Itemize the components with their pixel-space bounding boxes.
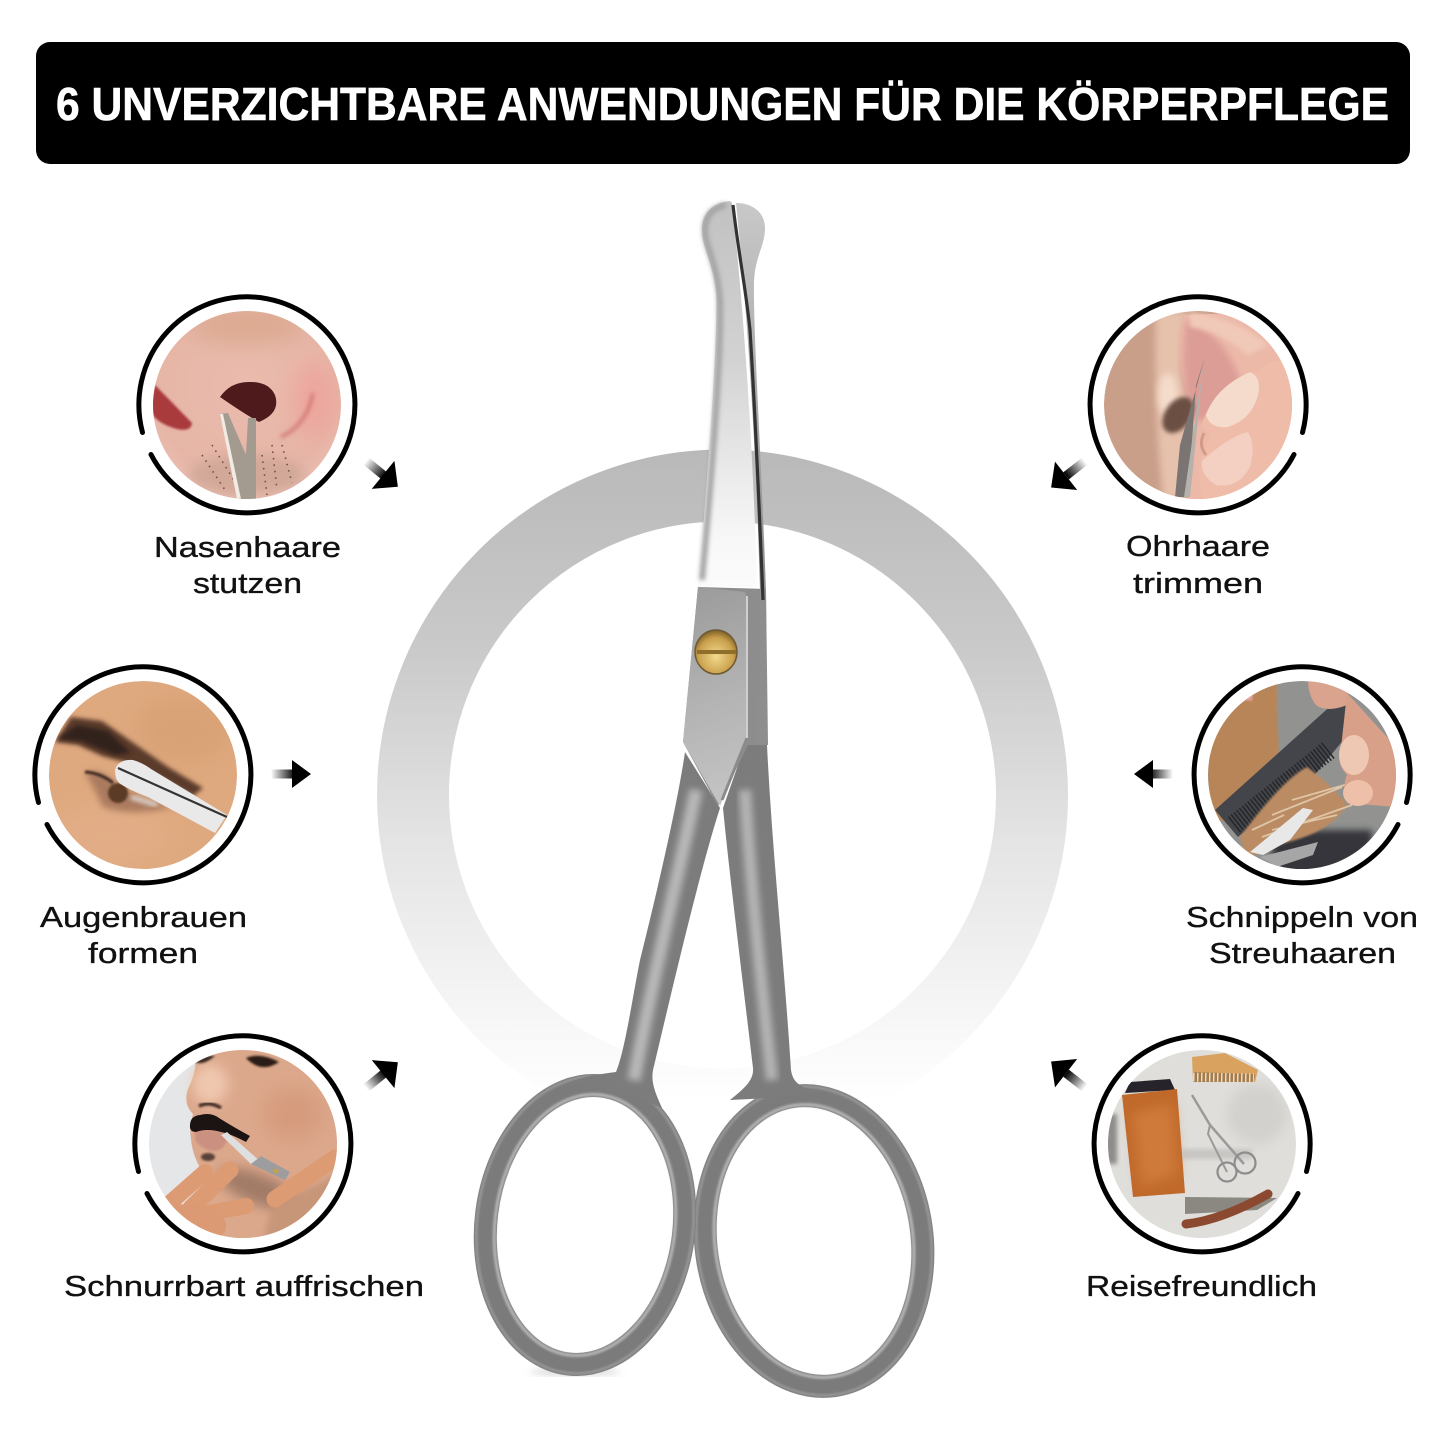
ring: moustache: [135, 1036, 351, 1252]
arrow: ear: [1040, 447, 1096, 502]
label: stray hairs: Schnippeln von: [1186, 902, 1418, 934]
label: eyebrow: Augenbrauen: [40, 902, 247, 934]
use case: eyebrow: [35, 667, 311, 970]
title banner: [36, 42, 1410, 164]
scissors: right finger ring: [677, 1071, 951, 1411]
label: travel: Reisefreundlich: [1086, 1271, 1317, 1303]
scissors: brass screw: [695, 630, 737, 674]
ring: travel: [1094, 1036, 1310, 1252]
ring: ear: [1090, 297, 1306, 513]
label: ear: trimmen: [1133, 568, 1263, 600]
label: eyebrow: [40, 902, 247, 970]
photo: eyebrow: [48, 681, 237, 869]
scissors: right shank: [723, 745, 820, 1100]
scissors: ground shadow: [530, 1369, 620, 1375]
background gradient ring: [413, 486, 1032, 1104]
label: ear: Ohrhaare: [1126, 531, 1270, 563]
arrow: travel: [1040, 1047, 1096, 1102]
photo: ear: [1104, 311, 1292, 499]
label: nose: stutzen: [193, 568, 302, 600]
label: stray hairs: [1186, 902, 1418, 970]
scissors: pivot body: [683, 587, 767, 806]
scissors: left blade: [698, 201, 757, 587]
scissors: [460, 201, 951, 1411]
photo: travel: [1102, 1050, 1296, 1238]
scissors: blade groove: [733, 205, 763, 600]
label: nose: Nasenhaare: [154, 532, 341, 564]
photo: moustache: [149, 1050, 337, 1248]
photo: nose: [149, 307, 341, 499]
use case: nose hair: [139, 297, 409, 600]
photo: stray hairs: [1208, 680, 1396, 880]
label: eyebrow: formen: [88, 938, 198, 970]
label: ear: [1126, 531, 1270, 600]
label: nose: [154, 532, 341, 600]
use case: stray hairs: [1134, 667, 1418, 970]
ring: stray hairs: [1194, 667, 1410, 883]
ring: eyebrow: [35, 667, 251, 883]
label: moustache: Schnurrbart auffrischen: [64, 1271, 424, 1303]
use case: travel friendly: [1040, 1036, 1317, 1303]
label: stray hairs: Streuhaaren: [1209, 938, 1396, 970]
use case: moustache: [64, 1036, 424, 1303]
arrow: eyebrow: [271, 760, 311, 788]
arrow: nose: [355, 447, 409, 501]
ring: nose: [139, 297, 355, 513]
scissors: right blade: [736, 203, 768, 745]
use case: ear hair: [1040, 297, 1306, 600]
scissors: left finger ring: [460, 1064, 710, 1386]
arrow: moustache: [355, 1048, 409, 1102]
scissors: left shank: [570, 752, 720, 1108]
arrow: stray hairs: [1134, 760, 1173, 788]
